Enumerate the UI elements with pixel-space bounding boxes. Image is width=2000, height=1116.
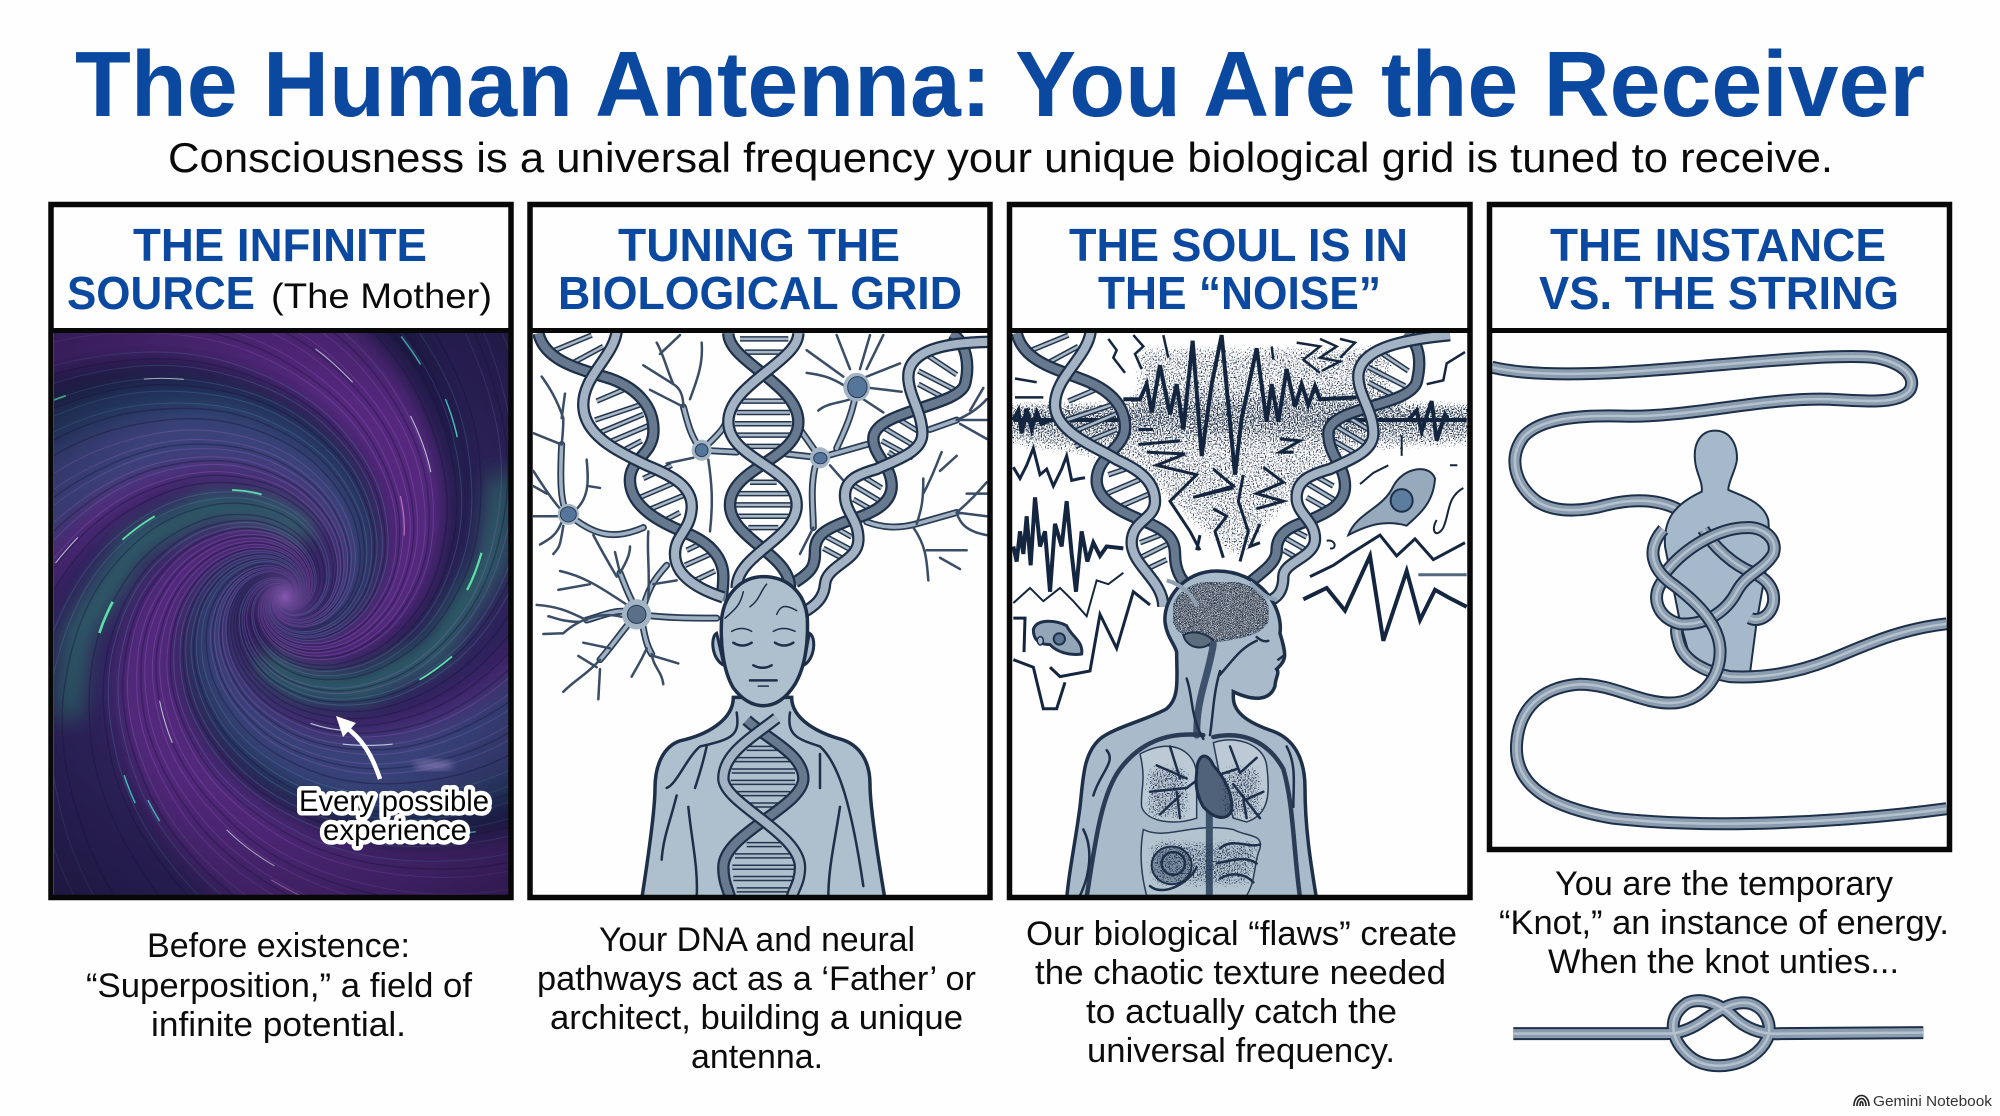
panel 4 caption xyxy=(1499,865,1949,981)
panel 2 caption: architect, building a unique xyxy=(550,999,963,1037)
swirl label: experience xyxy=(323,814,467,847)
panel 3 caption: the chaotic texture needed xyxy=(1035,954,1446,992)
neurons xyxy=(533,335,987,699)
small knot icon xyxy=(1513,1001,1923,1066)
panel 2 frame xyxy=(530,204,990,898)
helix left xyxy=(1017,331,1197,607)
fine dark strands xyxy=(54,333,508,895)
panel 4 caption: “Knot,” an instance of energy. xyxy=(1499,904,1949,942)
arrow pointing to swirl xyxy=(336,716,380,779)
title: The Human Antenna: You Are the Receiver xyxy=(75,32,1925,136)
panel 1 heading: (The Mother) xyxy=(271,277,492,316)
panel 4 heading: THE INSTANCE xyxy=(1550,219,1886,271)
panel 2 heading: BIOLOGICAL GRID xyxy=(558,267,962,319)
panel 3 frame xyxy=(1010,204,1470,898)
panel 2 caption: antenna. xyxy=(691,1038,823,1076)
panel 4 frame xyxy=(1490,204,1950,850)
panel 3 heading: THE “NOISE” xyxy=(1098,267,1381,319)
panel 2 illustration: person, DNA and neurons xyxy=(533,331,988,899)
waveforms xyxy=(1013,335,1467,709)
panel 1 heading: THE INFINITE xyxy=(133,219,427,271)
swirl label xyxy=(299,785,489,847)
panel 3 illustration: body, DNA and noise xyxy=(1000,331,1480,899)
figure silhouette xyxy=(1665,431,1770,673)
panel: the infinite source xyxy=(48,202,514,1043)
panel 1 heading xyxy=(67,219,492,319)
panel 1 frame xyxy=(51,204,511,898)
panel 3 caption xyxy=(1026,915,1457,1070)
panel 3 caption: to actually catch the xyxy=(1086,993,1397,1031)
rope upper xyxy=(1492,357,1912,512)
panel 3 heading: THE SOUL IS IN xyxy=(1069,219,1408,271)
body helix xyxy=(723,718,803,897)
panel 3 caption: Our biological “flaws” create xyxy=(1026,915,1457,953)
panel 2 caption: pathways act as a ‘Father’ or xyxy=(537,960,976,998)
bright streaks xyxy=(54,394,482,680)
panel 4 illustration: rope knot around figure xyxy=(1492,357,1947,824)
panel 4 caption: When the knot unties... xyxy=(1548,943,1899,981)
panel: tuning the biological grid xyxy=(530,204,990,1076)
panel 1 caption: infinite potential. xyxy=(151,1006,406,1044)
helix centre xyxy=(728,333,798,588)
helix right xyxy=(795,333,988,612)
stipple noise band xyxy=(1012,344,1468,558)
person with organs xyxy=(1067,571,1317,899)
helix left xyxy=(538,331,723,601)
panel 1 caption: “Superposition,” a field of xyxy=(86,967,473,1005)
panel 4 heading xyxy=(1539,219,1899,319)
fine light purple strands xyxy=(54,333,508,895)
subtitle: Consciousness is a universal frequency your unique biological grid is tuned to receive. xyxy=(168,134,1833,181)
panel 1 heading: SOURCE xyxy=(67,267,255,319)
panel 2 heading xyxy=(558,219,962,319)
panel 3 caption: universal frequency. xyxy=(1087,1032,1395,1070)
organ stipple xyxy=(1144,762,1264,888)
panel: the soul is in the noise xyxy=(1000,204,1480,1070)
panel 1 cosmic swirl illustration xyxy=(54,333,508,895)
panel 4 heading: VS. THE STRING xyxy=(1539,267,1899,319)
neck helix tails xyxy=(1167,580,1277,607)
panel 3 heading xyxy=(1069,219,1408,319)
panel 2 heading: TUNING THE xyxy=(618,219,900,271)
rope knot xyxy=(1516,528,1947,824)
helix right xyxy=(1250,333,1450,601)
panel: the instance vs the string xyxy=(1490,204,1950,1066)
panel 2 caption xyxy=(537,921,976,1076)
swirl label: Every possible xyxy=(299,785,489,818)
panel 2 caption: Your DNA and neural xyxy=(599,921,915,959)
panel 4 caption: You are the temporary xyxy=(1555,865,1893,903)
watermark: Gemini Notebook: Gemini Notebook xyxy=(1873,1093,1992,1110)
fine teal strands xyxy=(54,333,508,895)
panel 1 caption xyxy=(86,927,473,1044)
panel 1 caption: Before existence: xyxy=(147,927,410,965)
person xyxy=(642,577,885,899)
